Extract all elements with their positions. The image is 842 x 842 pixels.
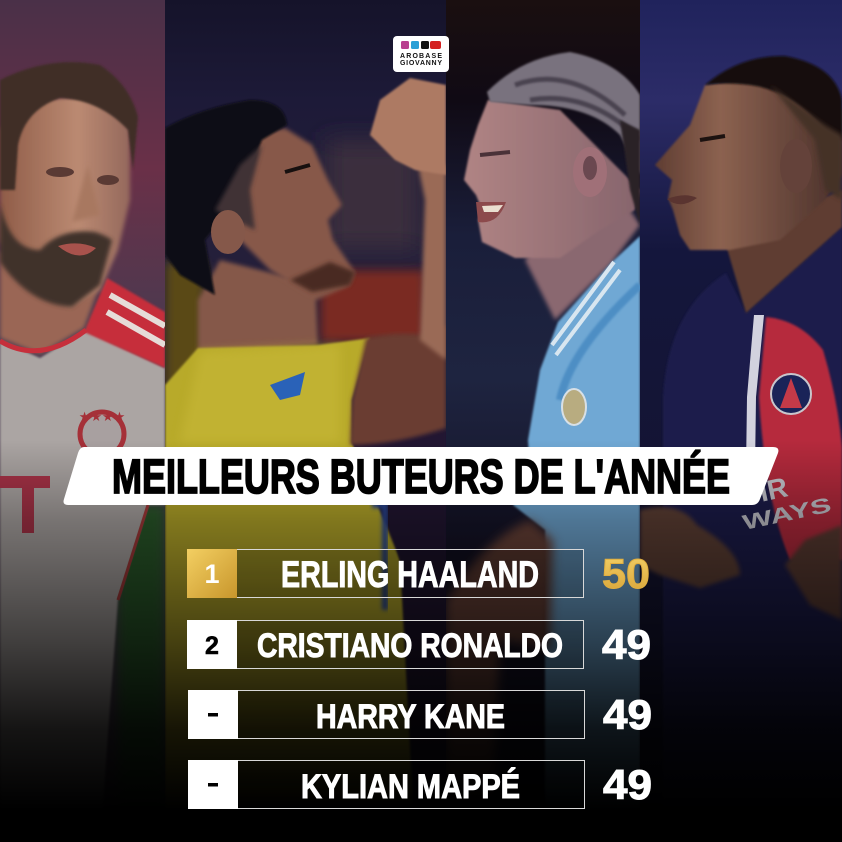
- icon: social media row: [401, 41, 441, 49]
- hair fade: [770, 85, 842, 200]
- crest tower: [780, 378, 802, 408]
- hair: [165, 100, 287, 295]
- fist: [370, 78, 446, 175]
- tongue: [58, 243, 96, 256]
- ear: [211, 210, 245, 254]
- sponsor: IR: [757, 471, 790, 508]
- right hand: [785, 525, 842, 620]
- lips: [667, 195, 697, 204]
- head: [655, 75, 842, 250]
- shirt: [513, 236, 640, 842]
- red stripe: [759, 317, 842, 560]
- neck: [726, 190, 842, 313]
- face: [240, 128, 355, 295]
- rank badge dash: [188, 690, 238, 739]
- rank number 1: 1: [204, 559, 220, 589]
- red shoulder: [84, 278, 165, 368]
- player name: CRISTIANO RONALDO: [257, 627, 563, 665]
- hair back dark: [620, 120, 640, 225]
- ear: [780, 139, 812, 193]
- ranking row 4: [188, 760, 652, 809]
- photo panel: Cristiano Ronaldo: [165, 0, 446, 842]
- telekom T: [0, 482, 50, 533]
- sponsor: [734, 463, 833, 535]
- forearm: [418, 165, 446, 360]
- Bayern crest: [80, 412, 124, 456]
- hair fade: [215, 145, 262, 230]
- blurred stadium colours: [325, 140, 420, 250]
- logo text: [400, 53, 442, 67]
- ear: [573, 147, 607, 197]
- shirt ribbing: [560, 285, 640, 400]
- goals 49: 49: [602, 621, 651, 668]
- goals 49: 49: [603, 691, 652, 738]
- eyes: [46, 167, 74, 177]
- City crest: [562, 389, 586, 425]
- stubble: [290, 262, 355, 292]
- goals 49: 49: [603, 761, 652, 808]
- rank badge 2: [187, 620, 237, 669]
- logo text: GIOVANNY: [400, 60, 442, 67]
- mouth: [476, 202, 506, 222]
- neck: [0, 250, 105, 354]
- photo panel: Harry Kane: [0, 0, 165, 842]
- beard: [0, 203, 112, 307]
- shirt seam: [372, 505, 385, 610]
- upper arm: [350, 325, 446, 445]
- face: [464, 100, 640, 258]
- hair: [705, 56, 842, 140]
- shirt lighter top: [180, 345, 340, 442]
- rank number 2: 2: [205, 632, 219, 660]
- hair streaks: [515, 79, 640, 140]
- photo panel: Erling Haaland: [446, 0, 640, 842]
- bottom dark gradient: [0, 440, 842, 842]
- neck: [523, 211, 640, 322]
- ranking row 1: [187, 549, 650, 598]
- face: [0, 95, 130, 307]
- rank badge 1: [187, 549, 237, 598]
- shirt: [663, 227, 842, 842]
- rank dash: [208, 713, 218, 716]
- goals 50: 50: [602, 550, 650, 597]
- player name: KYLIAN MAPPÉ: [301, 768, 520, 806]
- right dark lower: [352, 442, 413, 760]
- player name: ERLING HAALAND: [281, 554, 539, 595]
- collar stripe: [552, 262, 620, 355]
- PSG crest: [771, 374, 811, 414]
- player name: HARRY KANE: [316, 698, 505, 736]
- ranking row 3: [188, 690, 652, 739]
- shirt red side line: [118, 505, 148, 600]
- white stripe: [746, 315, 764, 470]
- photo panel: Kylian Mbappé: [640, 0, 842, 842]
- collar: [0, 330, 86, 351]
- rank dash: [208, 783, 218, 786]
- green pitch: [118, 505, 165, 698]
- logo text: AROBASE: [400, 53, 442, 60]
- crest stars: ★★★★: [79, 410, 125, 425]
- eyebrow: [285, 165, 310, 172]
- arm: [446, 520, 553, 842]
- nose shadow: [73, 172, 97, 221]
- sponsor logo: [270, 372, 305, 400]
- hair: [0, 62, 138, 190]
- eye: [700, 136, 725, 140]
- sponsor: WAYS: [741, 494, 833, 535]
- shirt: [165, 337, 410, 772]
- neck: [198, 260, 350, 355]
- ranking row 2: [187, 620, 651, 669]
- shirt: [0, 332, 165, 759]
- title banner: [64, 447, 778, 505]
- logo badge: [393, 36, 449, 72]
- rank badge dash: [188, 760, 238, 809]
- hair: [487, 52, 640, 175]
- eye: [480, 152, 510, 155]
- left hand: [640, 507, 740, 588]
